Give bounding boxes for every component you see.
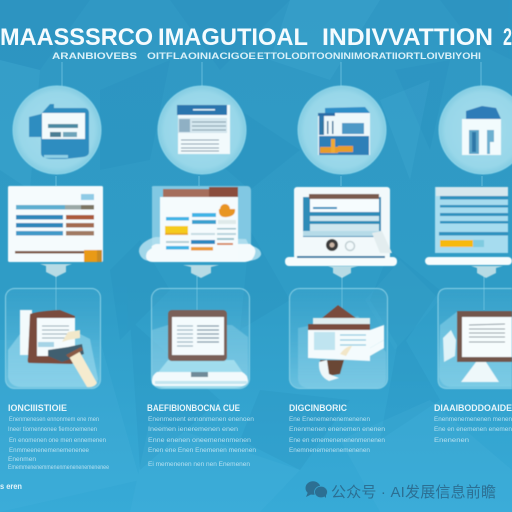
column text 4: Enenenen	[434, 437, 469, 444]
pedestal connector 4	[471, 266, 503, 278]
title: INDIVVATTION	[322, 24, 493, 51]
icon: chat bubbles	[306, 481, 328, 498]
column text 1: Enenmen	[8, 456, 36, 463]
frame 1: document with magnifier	[6, 288, 100, 388]
title: MAASSSRCO	[0, 24, 153, 51]
card 1: report panel	[8, 186, 103, 262]
card 4: form panel	[425, 187, 512, 265]
subtitle: ARANBIOVEBS	[52, 51, 137, 62]
circle icon 3: building and chart	[298, 86, 386, 174]
column text 2: Enenmenent ennonmenen enenoen	[148, 416, 254, 423]
column text 1: Ineer tiornennenee fiemonemenen	[8, 426, 97, 433]
subtitle	[52, 51, 481, 62]
frame 3: open document	[290, 288, 388, 388]
frame 2: laptop	[152, 288, 250, 388]
column text 1: Ememmenenemmenenmenenenemenenee	[8, 464, 109, 471]
title: IMAGUTIOAL	[158, 24, 308, 51]
connector lines	[56, 62, 484, 330]
column text 4: DIAAIBODDOAIDE	[434, 403, 512, 413]
column text 1: IONCIIISTIOIE	[8, 403, 67, 413]
column text 4	[434, 403, 512, 444]
circle icon 1: monitor	[13, 86, 101, 174]
column text 2: Ei memenenen nen nen Enemenen	[148, 461, 250, 468]
column text 3: DIGCINBORIC	[289, 403, 347, 413]
frame 4: monitor	[438, 288, 512, 388]
column text 4: Ene en enemenen enemen	[434, 426, 512, 433]
circle icon 4: house	[439, 86, 512, 174]
pedestal connector 2	[183, 265, 219, 278]
card 3: laptop	[285, 187, 397, 266]
column text 1: En enomenen one men ennemenen	[9, 437, 106, 444]
column text 4: Enenmenemenenen menen	[434, 416, 512, 423]
pedestal connector 1	[40, 264, 72, 277]
column text 3: Enemnenemenenemenenen	[289, 447, 370, 454]
subtitle: OITFLAOINIACIGOE	[147, 51, 256, 62]
circle icon 2: document	[158, 86, 246, 174]
column text 3	[289, 403, 385, 454]
column text 3: Enenmenen enenemen enenen	[289, 426, 385, 433]
column text 1: Enenmenesen ennonmem ene men	[9, 416, 99, 423]
subtitle: ETTOLODITOONINIMORATIIORTLOIVBIYOHI	[257, 51, 481, 62]
column text 2	[147, 403, 256, 468]
column text 3: Ene en ememenenenenmenenen	[289, 437, 385, 444]
column text 1: s eren	[0, 482, 22, 491]
column text 2: Ineemen ieneremenen enen	[148, 426, 238, 433]
title	[0, 24, 512, 51]
column text 1	[0, 403, 109, 491]
column text 2: Enen ene Enen Enemenen menenen	[148, 447, 256, 454]
column text 1: Enmmeenenemenemenenee	[9, 447, 89, 454]
watermark: 公众号 · AI发展信息前瞻	[331, 484, 496, 501]
column text 3: Ene Enenemenenemenenen	[289, 416, 370, 423]
pedestal connector 3	[328, 266, 358, 278]
column text 2: Enne enenen oneemenenmenen	[148, 437, 251, 444]
card 2: cloud dashboard	[139, 186, 261, 262]
column text 2: BAEFIBIONBOCNA CUE	[147, 403, 240, 413]
